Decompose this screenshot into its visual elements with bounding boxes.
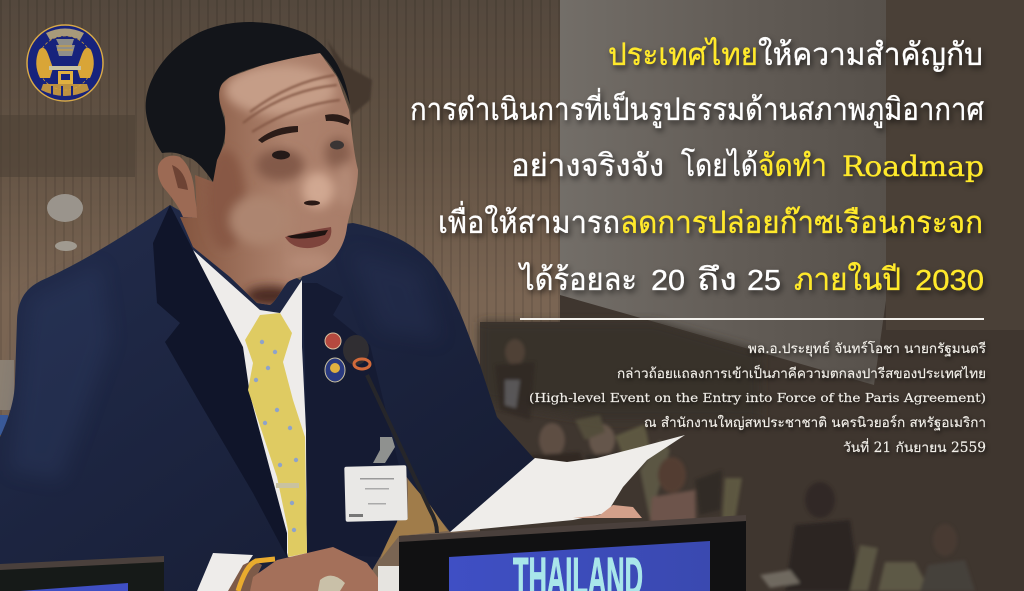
speaker and event details: พล.อ.ประยุทธ์ จันทร์โอชา นายกรัฐมนตรี (748, 340, 986, 357)
headline: เพื่อให้สามารถ (438, 201, 620, 240)
tan gap by microphone (380, 480, 448, 560)
headline: ให้ความสำคัญกับ (758, 37, 983, 72)
shirt (193, 250, 307, 560)
speaker and event details: (High-level Event on the Entry into Force of the Paris Agreement) (529, 390, 986, 405)
paper on desk (378, 566, 399, 591)
lapel pins (325, 333, 345, 382)
right lapel (302, 283, 400, 557)
speaker and event details: ณ สำนักงานใหญ่สหประชาชาติ นครนิวยอร์ก สหรัฐอเมริกา (644, 414, 986, 431)
hair (146, 22, 350, 182)
divider line (520, 318, 984, 320)
name plate: Thailand (399, 515, 746, 591)
shirt cuff and hand (197, 547, 388, 591)
headline: Roadmap (842, 150, 984, 183)
suit jacket (0, 205, 537, 591)
name plate: left delegation (0, 556, 164, 591)
paper held in hand (450, 435, 685, 532)
headline: ได้ร้อยละ (517, 262, 637, 297)
suit sheen (10, 250, 440, 480)
headline: อย่างจริงจัง (511, 148, 664, 183)
left lapel (153, 205, 287, 557)
headline: ถึง (697, 262, 737, 297)
headline: 20 (651, 265, 685, 297)
headline: ประเทศไทย (608, 37, 758, 72)
speaker and event details (529, 340, 986, 456)
headline: ลดการปล่อยก๊าซเรือนกระจก (620, 205, 983, 240)
neck and face (180, 53, 358, 306)
headline (410, 37, 984, 297)
speaker and event details: กล่าวถ้อยแถลงการเข้าเป็นภาคีความตกลงปารีสของประเทศไทย (617, 364, 986, 382)
person: prime minister (0, 22, 537, 591)
speaker and event details: วันที่ 21 กันยายน 2559 (843, 438, 986, 456)
headline: 2030 (915, 265, 984, 297)
audience seated in background (495, 339, 975, 591)
logo: government seal (27, 25, 103, 101)
microphone (343, 335, 437, 533)
headline: โดยได้ (681, 148, 758, 183)
headline: ภายในปี (794, 262, 901, 297)
headline: จัดทำ (758, 148, 827, 183)
ear (158, 156, 198, 218)
delegate badge (344, 437, 408, 522)
headline: 25 (747, 265, 781, 297)
yellow necktie (245, 313, 307, 557)
